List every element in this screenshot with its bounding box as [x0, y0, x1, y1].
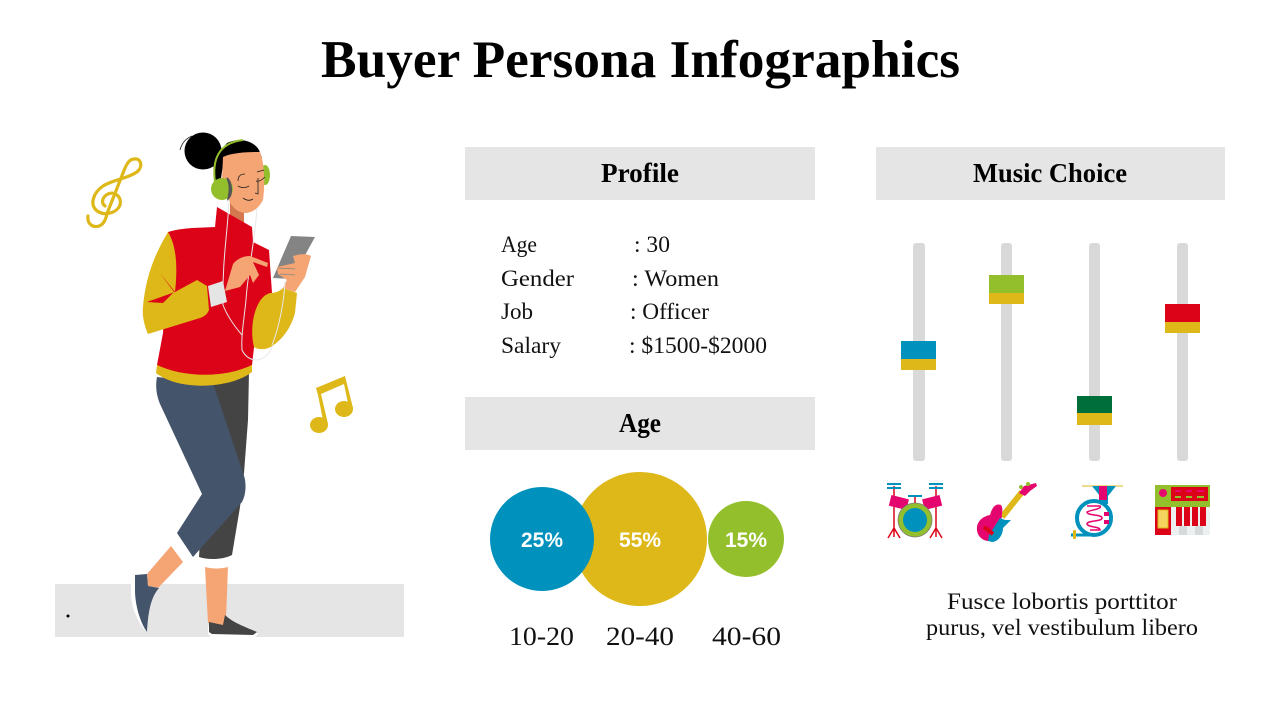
heading: age — [465, 397, 815, 450]
panel: profile — [465, 147, 815, 359]
age range labels — [509, 622, 781, 651]
right sleeve — [252, 288, 297, 349]
heading: profile — [465, 147, 815, 200]
profile details: Gender — [501, 266, 574, 292]
profile details: Job — [501, 299, 533, 325]
slider: keyboard — [1165, 243, 1200, 461]
floor band — [55, 584, 404, 637]
jacket hem — [156, 365, 252, 386]
profile details: : $1500-$2000 — [629, 333, 767, 359]
icon: french horn — [1071, 486, 1123, 539]
icon: guitar — [977, 482, 1037, 542]
raised shoe — [131, 574, 159, 632]
illustration: person listening to music — [55, 132, 404, 638]
front leg trousers — [156, 377, 246, 557]
heading: profile: Profile — [601, 158, 679, 188]
age range labels: 20-40 — [606, 622, 674, 651]
bubble: 15% — [708, 501, 784, 577]
icon: drum kit — [887, 484, 943, 538]
slider: drums — [901, 243, 936, 461]
panel: music choice — [876, 147, 1225, 641]
title: Buyer Persona Infographics — [321, 31, 960, 89]
standing shoe — [208, 615, 258, 638]
profile details: : 30 — [634, 232, 670, 258]
profile details — [501, 232, 767, 359]
pointing hand — [225, 256, 268, 291]
hair — [213, 140, 262, 185]
profile details: : Officer — [630, 299, 709, 325]
icon: synthesizer — [1155, 485, 1210, 535]
hair bun — [184, 132, 222, 170]
heading: music choice — [876, 147, 1225, 200]
bubble: 15%: 15% — [725, 529, 767, 552]
back leg trousers — [199, 372, 249, 559]
caption — [926, 589, 1198, 641]
holding hand — [277, 254, 311, 292]
slider: horn — [1077, 243, 1112, 461]
bubble: 25% — [490, 487, 594, 591]
earphone cables — [223, 200, 286, 360]
face — [222, 152, 264, 213]
cuff — [208, 281, 227, 307]
red jacket — [157, 207, 272, 376]
heading: music choice: Music Choice — [973, 158, 1127, 188]
phone — [273, 236, 315, 279]
ear cup — [211, 178, 233, 200]
profile details: : Women — [632, 266, 719, 292]
icon: treble clef — [88, 159, 141, 227]
bubble: 55%: 55% — [619, 529, 661, 552]
raised lower leg — [147, 546, 183, 588]
neck — [230, 200, 244, 226]
slider: guitar — [989, 243, 1024, 461]
floor dot — [66, 614, 70, 618]
far ear cup — [260, 165, 270, 185]
left sleeve — [143, 232, 209, 334]
caption: Fusce lobortis porttitor — [947, 589, 1177, 615]
profile details: Salary — [501, 333, 561, 359]
age range labels: 10-20 — [509, 622, 574, 651]
heading: age: Age — [619, 408, 661, 438]
sleeve crease — [147, 273, 175, 303]
bubble: 25%: 25% — [521, 529, 563, 552]
panel: age — [465, 397, 815, 651]
age range labels: 40-60 — [712, 622, 781, 651]
profile details: Age — [501, 232, 537, 258]
standing lower leg — [205, 567, 228, 626]
bubble: 55% — [573, 472, 707, 606]
icon: music note — [310, 376, 353, 433]
headband — [214, 140, 243, 182]
caption: purus, vel vestibulum libero — [926, 615, 1198, 641]
face details — [238, 170, 265, 200]
